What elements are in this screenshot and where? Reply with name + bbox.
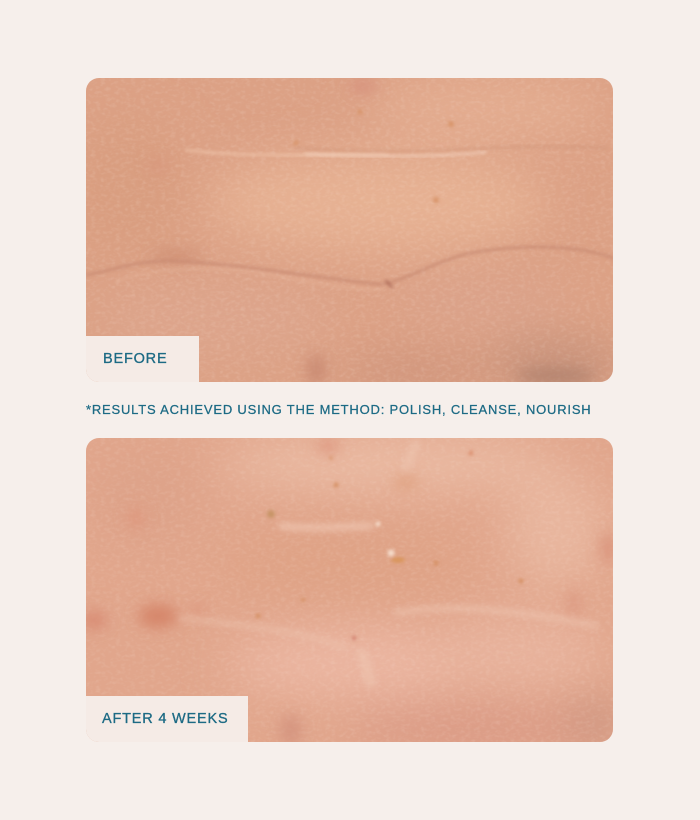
- label: after 4 weeks: [86, 696, 248, 742]
- label: before: [86, 336, 199, 382]
- panel: before photo: [86, 78, 613, 382]
- panel: after photo: [86, 438, 613, 742]
- wrinkles: [86, 146, 613, 290]
- photo: forehead skin after 4 weeks: [86, 438, 613, 742]
- caption: method note: *RESULTS ACHIEVED USING THE METHOD: POLISH, CLEANSE, NOURISH: [86, 402, 592, 417]
- label: after 4 weeks: AFTER 4 WEEKS: [102, 711, 228, 727]
- photo: forehead skin before treatment: [86, 78, 613, 382]
- pale skin patches: [181, 443, 596, 683]
- label: before: BEFORE: [103, 351, 167, 367]
